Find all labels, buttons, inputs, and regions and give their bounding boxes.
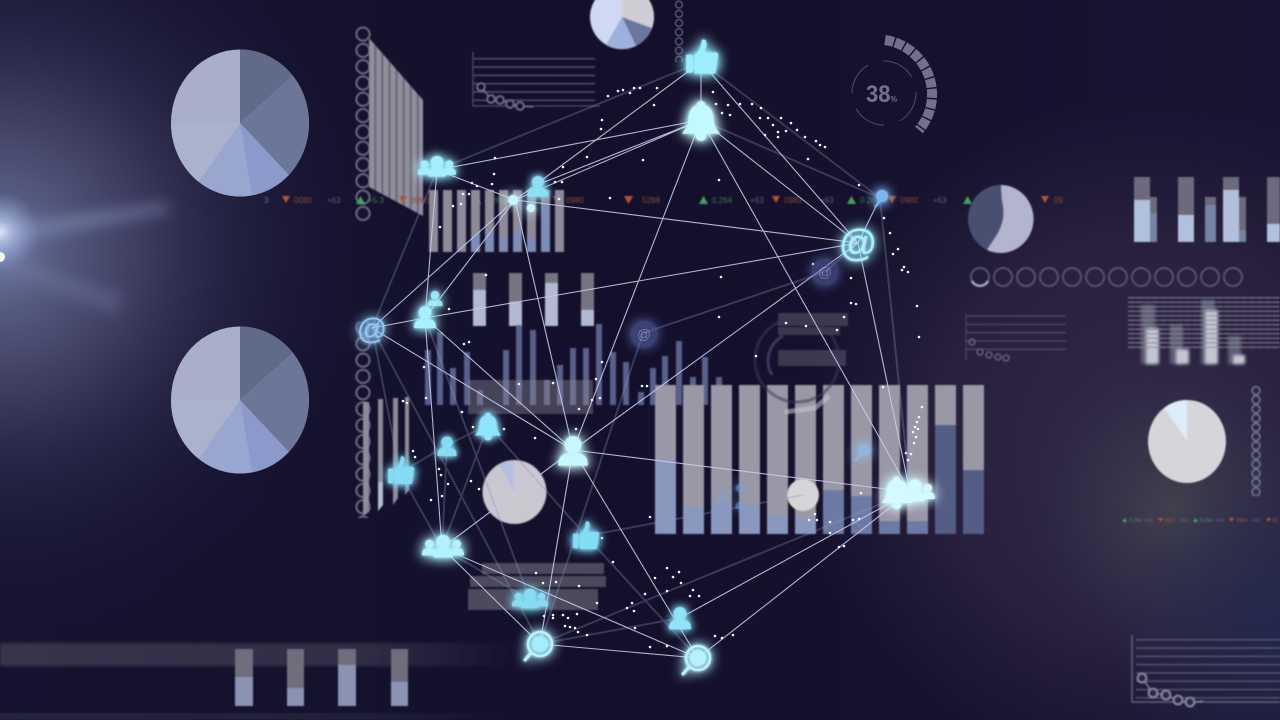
icon: person, centre — [558, 436, 588, 466]
line chart: bottom right — [1132, 635, 1280, 706]
ticker strip: top: 0980 — [784, 196, 802, 205]
ticker strip: top: 3 — [264, 196, 269, 205]
icon: users, upper left — [418, 156, 456, 177]
icon: thumbs up, dim left — [388, 456, 414, 484]
ticker strip: lower right: +63 — [1144, 518, 1153, 524]
icon: search, lower centre — [525, 632, 552, 660]
icon: share node on bars — [719, 484, 742, 510]
icon: bell, dim — [475, 413, 501, 440]
lens flare — [0, 185, 170, 315]
icon: search, lower right — [683, 646, 710, 674]
icon: bell, top — [682, 101, 720, 141]
highlight dot on bars — [787, 479, 819, 511]
translucent block: lower centre — [468, 563, 606, 610]
ticker strip: lower right: 0.264 — [1200, 518, 1213, 524]
icon: person, upper centre — [528, 176, 548, 196]
pie chart: right — [968, 185, 1034, 253]
icon: users, bright right cluster — [882, 477, 935, 509]
icon: at sign, right: @ — [839, 223, 877, 265]
ticker strip: lower right: +63 — [1215, 518, 1224, 524]
icon: thumbs up, top — [686, 39, 718, 74]
network edges — [372, 62, 910, 658]
scattered data dots — [403, 88, 922, 647]
perspective bars: lower left — [363, 397, 409, 516]
icon: search node, upper centre — [508, 195, 535, 212]
ticker strip: top: 0080 — [294, 196, 312, 205]
ticker strip: top — [264, 196, 1063, 205]
ring column: right — [1251, 386, 1261, 496]
icon: users, lower centre — [512, 589, 548, 608]
ticker strip: top: 0980 — [566, 196, 584, 205]
large bar chart — [655, 385, 984, 534]
radial gauge: 38% — [852, 40, 932, 130]
pie chart: upper left — [171, 50, 309, 197]
pie chart: lower left — [171, 326, 309, 474]
ticker strip: lower right: +63 — [1179, 518, 1188, 524]
bar chart: upper centre — [429, 190, 564, 252]
icon: person, dim — [437, 437, 457, 456]
bar chart: stacked small — [473, 273, 594, 326]
icon: users, lower left — [422, 535, 464, 557]
line chart: top — [473, 52, 600, 110]
translucent block: centre — [468, 380, 593, 414]
pie chart: top centre — [590, 0, 654, 49]
bottom edge band — [0, 713, 510, 720]
icon: blue node, right — [875, 190, 888, 207]
icon: at sign, dim centre: @ — [637, 326, 651, 342]
icon: at sign, dim right — [812, 259, 838, 285]
icon: at sign, left: @ — [357, 313, 387, 346]
icon: thumbs up, lower centre — [573, 521, 599, 549]
icon: dim node on bars — [855, 444, 870, 461]
ticker strip: top: +63 — [327, 196, 341, 205]
ticker strip: top: 5288 — [642, 196, 660, 205]
icon: at sign, dim right: @ — [818, 264, 832, 280]
line chart: right middle — [966, 313, 1066, 361]
ticker strip: lower right: 09 — [1272, 518, 1278, 524]
text and bars block: right — [1128, 295, 1280, 364]
ticker strip: top: 0.264 — [860, 196, 881, 205]
ring row: right — [971, 268, 1242, 286]
ticker strip: top: 0980 — [900, 196, 918, 205]
ring column: upper — [355, 26, 371, 222]
ticker strip: top: 0.264 — [712, 196, 733, 205]
ticker strip: lower right: 0.264 — [1129, 518, 1142, 524]
ring column: lower — [355, 322, 371, 518]
icon: person, left — [414, 291, 443, 328]
ticker strip: top: +63 — [750, 196, 764, 205]
bottom band — [0, 643, 515, 666]
ticker strip: top: +5.3 — [368, 196, 384, 205]
ticker strip: lower right: +63 — [1252, 518, 1261, 524]
vertical chain: top — [674, 0, 684, 62]
ticker strip: top: +63 — [933, 196, 947, 205]
icon: at sign, dim centre — [631, 321, 657, 347]
ticker strip: top: 0.264 — [485, 196, 506, 205]
ring dial: faint — [755, 313, 848, 412]
icon: person, lower right — [669, 607, 691, 629]
ticker strip: lower right: 0980 — [1236, 518, 1247, 524]
ticker strip: top: +63 — [820, 196, 834, 205]
faint network edges — [372, 62, 910, 658]
ticker strip: lower right — [1122, 518, 1278, 524]
radial gauge: 38%: 38% — [866, 81, 897, 108]
ticker strip: top: 0980 — [411, 196, 429, 205]
thin blue bar chart — [425, 324, 722, 405]
ticker strip: top: 09 — [1054, 196, 1063, 205]
ticker strip: top: 0.264 — [976, 196, 997, 205]
pie chart: centre beige — [482, 460, 546, 524]
perspective bar wall — [369, 38, 423, 216]
ticker strip: lower right: 0980 — [1164, 518, 1175, 524]
bar chart: bottom left — [235, 649, 408, 706]
pie chart: lower right — [1148, 400, 1226, 483]
stacked bars: top right — [1134, 177, 1280, 242]
